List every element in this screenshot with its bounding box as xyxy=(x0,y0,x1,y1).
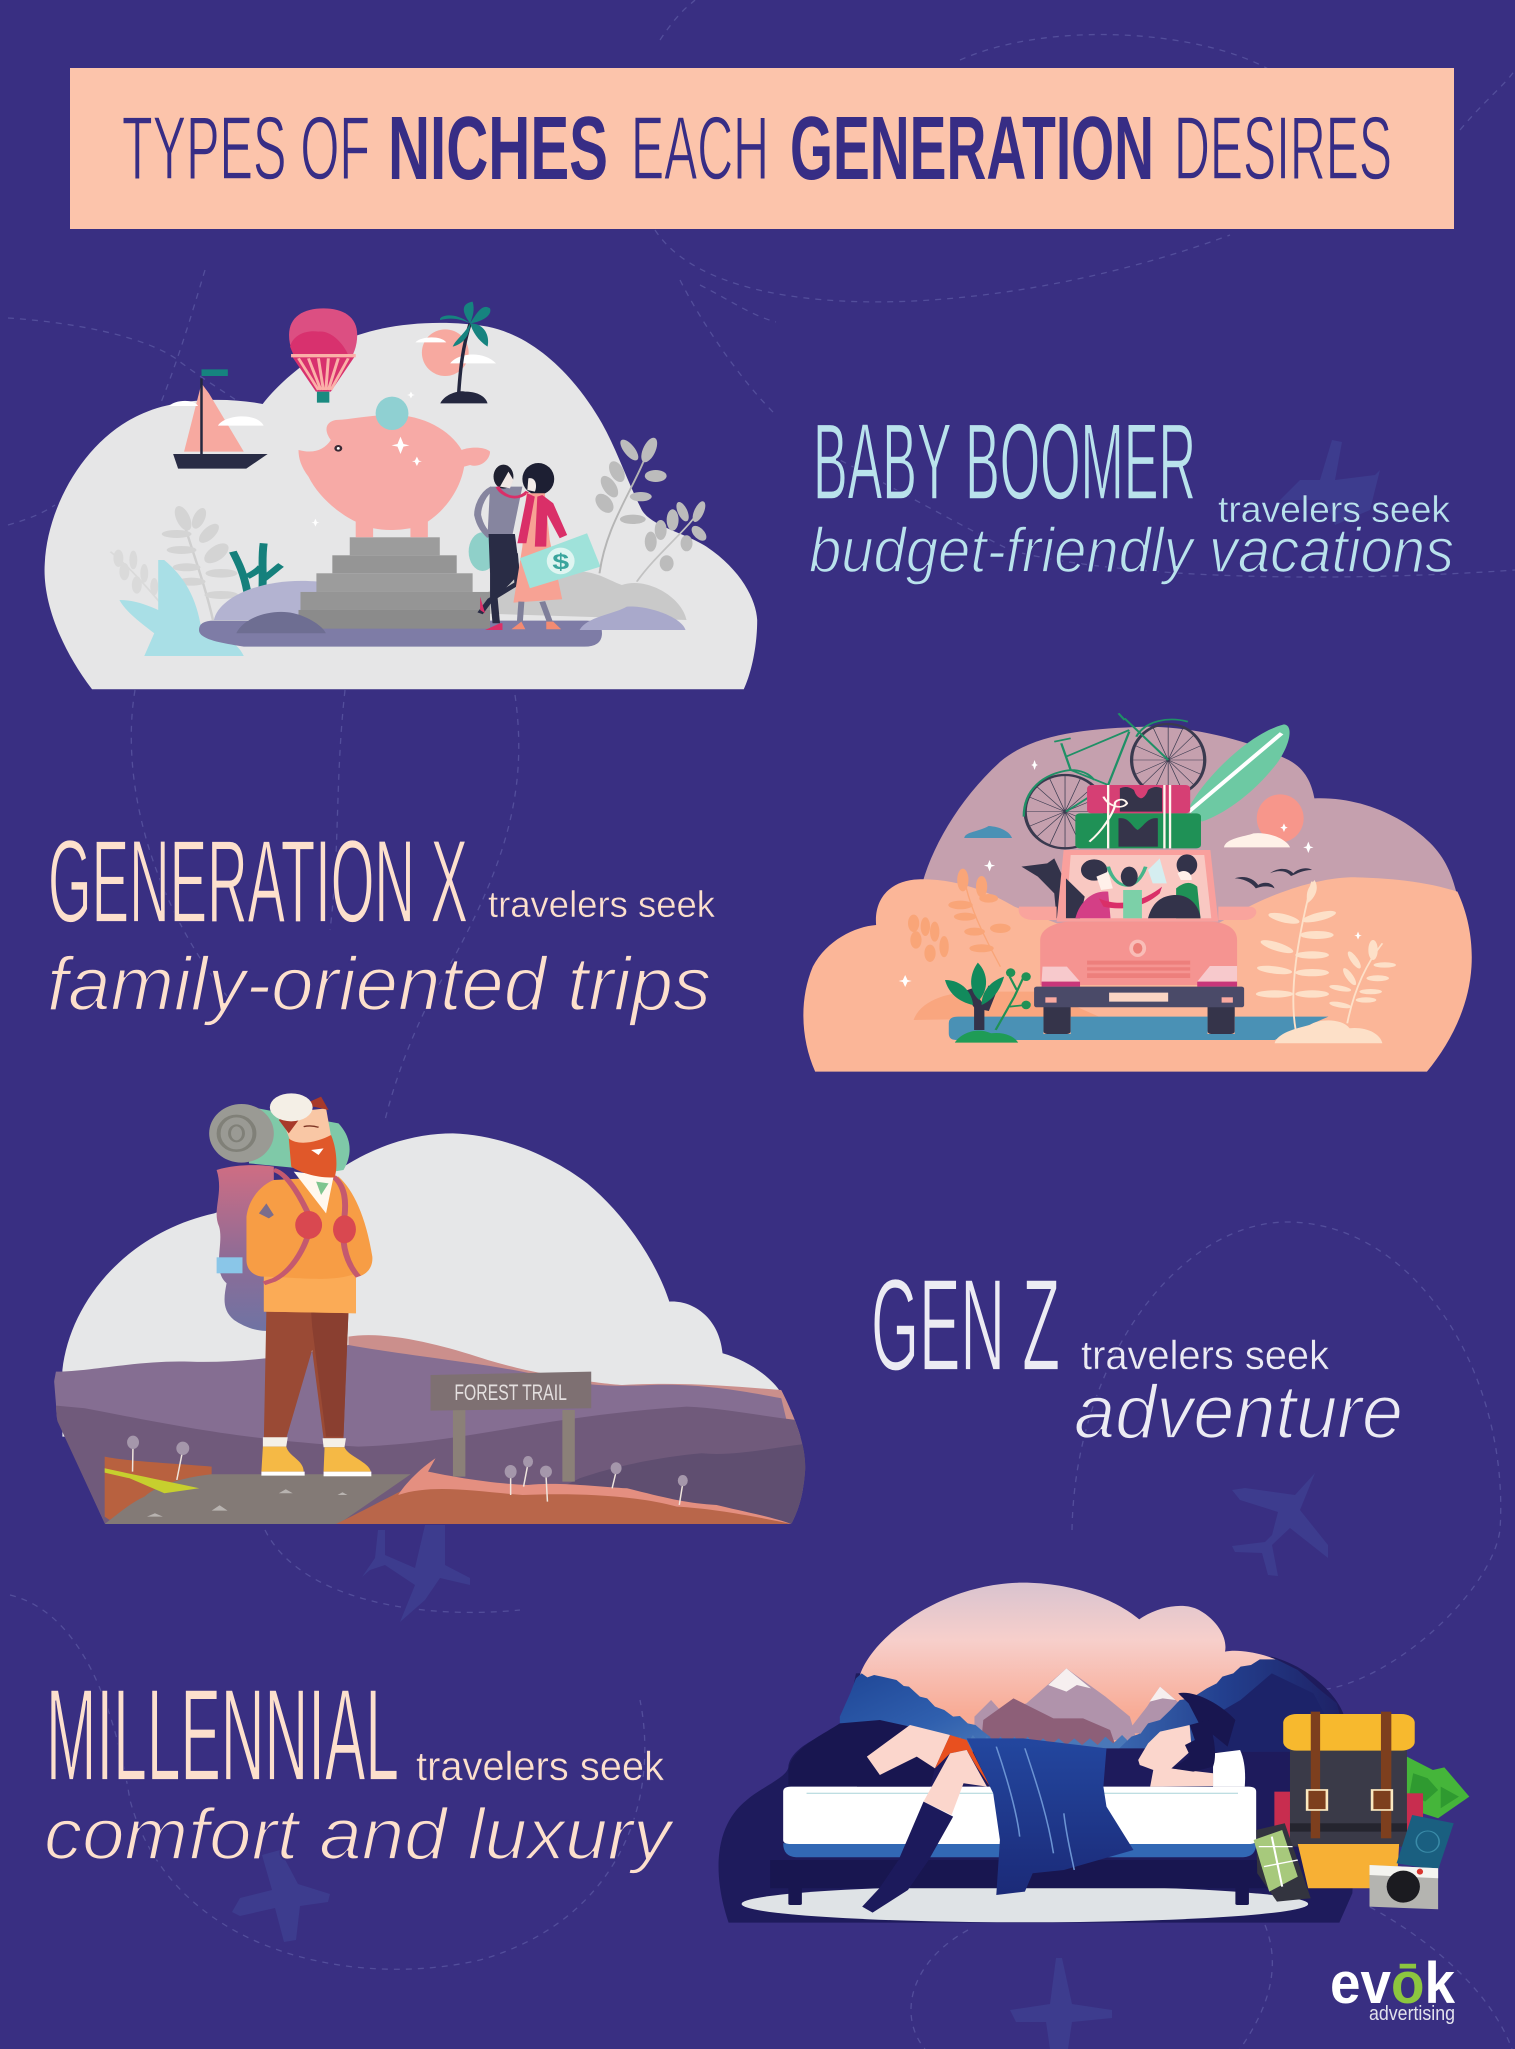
icon: orange plant xyxy=(908,869,1011,967)
text: millennial xyxy=(44,1661,675,1875)
icon: bicycle xyxy=(1024,713,1205,848)
cloud xyxy=(62,1133,781,1437)
text: millennial: MILLENNIAL xyxy=(46,1661,399,1808)
couple with money: $ xyxy=(552,550,570,574)
hiker xyxy=(209,1093,372,1476)
panel: generation x illustration xyxy=(803,713,1472,1072)
peach cloud xyxy=(803,877,1472,1072)
icon: passport xyxy=(1397,1815,1454,1870)
sign: forest trail xyxy=(431,1372,591,1482)
icon: tablet map xyxy=(1254,1823,1311,1902)
sleeping person xyxy=(857,1720,1245,1913)
couple with money xyxy=(469,463,600,630)
jacket xyxy=(246,1177,372,1313)
logo: evok advertising: evōk xyxy=(1330,1951,1456,2016)
icon: hot air balloon xyxy=(289,308,357,403)
cloud background xyxy=(45,323,757,689)
icon: plants right xyxy=(592,437,709,582)
icon: birds and sparkles xyxy=(899,760,1362,987)
text: generation x: family-oriented trips xyxy=(47,942,711,1027)
mauve cloud xyxy=(921,727,1457,957)
icon: cream plants and mound xyxy=(1256,880,1396,1043)
icon: piggy bank xyxy=(298,392,490,537)
hills xyxy=(50,1335,811,1524)
text: gen z: travelers seek xyxy=(1081,1332,1329,1378)
text: generation x xyxy=(47,816,715,1027)
bottle xyxy=(217,1257,242,1273)
icon: clouds and sun xyxy=(964,794,1304,847)
text: gen z xyxy=(871,1251,1403,1455)
road xyxy=(949,1017,1328,1040)
text: gen z: adventure xyxy=(1074,1370,1403,1455)
dark cloud xyxy=(719,1657,1353,1923)
icon: palm tree and sun xyxy=(415,302,496,403)
panel: millennial illustration xyxy=(719,1583,1469,1923)
icon: sailboat xyxy=(169,369,268,469)
text: generation x: GENERATION X xyxy=(48,816,468,948)
title banner xyxy=(70,68,1454,229)
legs xyxy=(264,1312,348,1438)
sky xyxy=(846,1583,1277,1747)
text: baby boomer: travelers seek xyxy=(1218,489,1451,530)
title banner: GENERATION xyxy=(790,99,1154,199)
backpack xyxy=(217,1165,274,1331)
text: millennial: travelers seek xyxy=(416,1743,664,1789)
dark rock xyxy=(236,612,326,633)
stairs xyxy=(298,537,490,629)
text: generation x: travelers seek xyxy=(488,884,715,925)
text: baby boomer xyxy=(809,401,1454,586)
panel: gen z illustration xyxy=(50,1093,811,1524)
mountains xyxy=(974,1668,1199,1747)
title banner: EACH xyxy=(631,99,769,199)
text: millennial: comfort and luxury xyxy=(44,1795,675,1875)
rocks and platform xyxy=(199,571,687,647)
title banner: NICHES xyxy=(388,99,608,199)
icon: plants left xyxy=(110,505,281,656)
sign: forest trail: FOREST TRAIL xyxy=(454,1380,567,1405)
text: gen z: GEN Z xyxy=(871,1251,1060,1398)
text: baby boomer: budget-friendly vacations xyxy=(809,516,1454,586)
panel: baby boomer illustration xyxy=(45,302,757,689)
icon: dog xyxy=(1021,858,1085,918)
backpack xyxy=(1274,1712,1469,1888)
background plane icons xyxy=(232,440,1380,2049)
icon: green plant xyxy=(945,963,1031,1043)
title banner: TYPES OF xyxy=(122,99,370,199)
icon: suitcases on roof xyxy=(1075,785,1201,848)
bed xyxy=(742,1787,1308,1922)
car with family xyxy=(1019,850,1256,1034)
icon: surfboard xyxy=(1188,724,1290,822)
bedroll xyxy=(249,1107,350,1172)
dandelions xyxy=(127,1436,688,1505)
head xyxy=(280,1108,334,1150)
icon: camera xyxy=(1370,1865,1438,1909)
logo: evok advertising: advertising xyxy=(1369,2003,1455,2025)
forest xyxy=(788,1659,1350,1788)
